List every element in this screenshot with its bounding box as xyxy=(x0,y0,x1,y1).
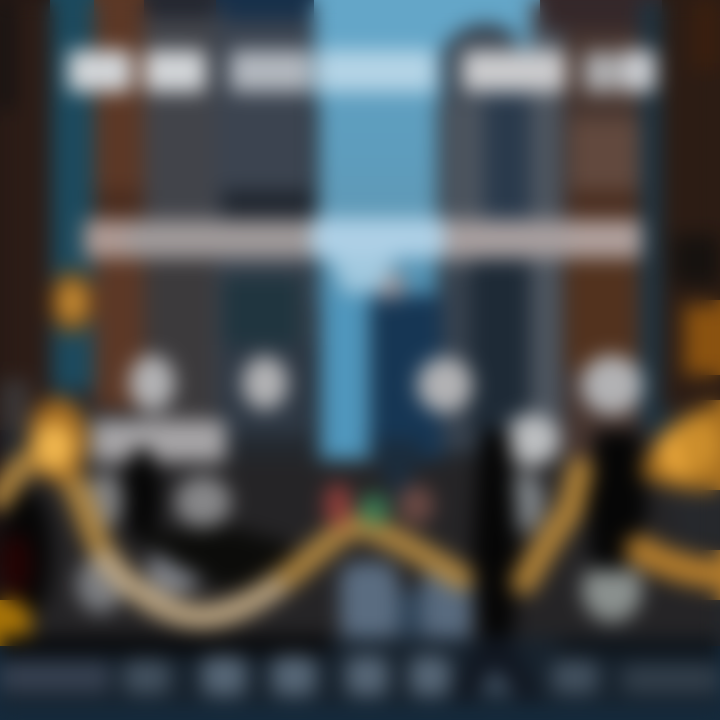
buildings: center tower xyxy=(330,258,442,500)
lower dark fill between figures xyxy=(0,460,720,645)
buildings: right side xyxy=(442,0,720,460)
title block: headline word bars xyxy=(68,50,656,92)
chart: golden wave line xyxy=(0,456,720,616)
silhouettes: dark figures xyxy=(0,430,648,650)
label block left xyxy=(92,420,226,462)
buildings: left side xyxy=(0,0,312,450)
subtitle band xyxy=(84,218,642,258)
ground lights row xyxy=(0,656,720,696)
ground strip xyxy=(0,636,720,720)
sky column xyxy=(314,0,540,475)
blue-grey pillars below center xyxy=(340,440,472,650)
glow: yellow peak left xyxy=(28,398,88,482)
icon: amber lamp left xyxy=(50,270,94,334)
glow: low amber left corner xyxy=(0,598,32,646)
label blobs lower xyxy=(76,414,642,622)
accent: red and green center markers xyxy=(324,483,434,527)
figure legs over ground xyxy=(452,640,540,700)
glow: golden dome right xyxy=(640,402,720,491)
label blobs row xyxy=(129,355,643,415)
panel: grey shadow under dome xyxy=(668,482,720,545)
